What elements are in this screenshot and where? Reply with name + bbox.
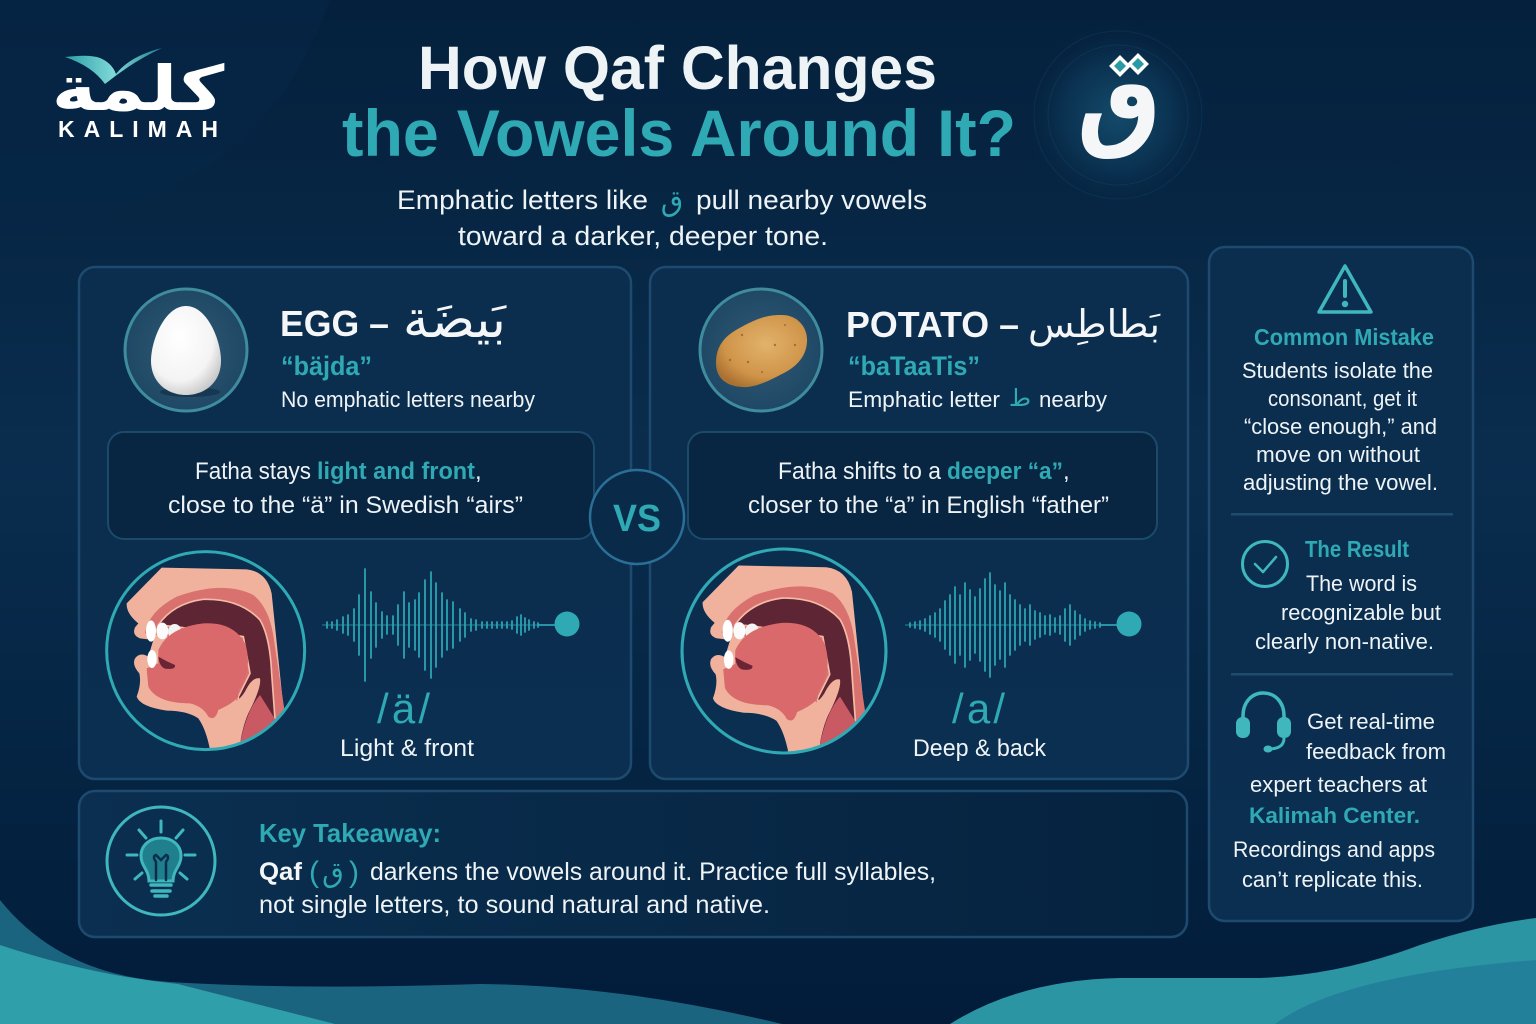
egg explanation box: close to the “ä” in Swedish “airs” [168,492,523,519]
egg explanation box [108,432,594,539]
title [342,34,1016,170]
subtitle: ق [661,184,683,218]
panel: potato [650,267,1188,779]
common mistake text: adjusting the vowel. [1243,470,1438,495]
feedback text [1233,709,1446,892]
potato heading: بَطاطِس [1028,302,1160,346]
waveform: deep vowel [905,573,1142,677]
result text: recognizable but [1281,600,1442,625]
logo Arabic wordmark: كلمة [52,53,225,125]
takeaway text: ( [309,856,319,889]
VS badge [590,470,684,564]
logo: Kalimah [52,48,225,142]
potato note: Emphatic letter [848,387,1000,412]
potato heading: POTATO – [846,304,1019,345]
vowel description: light and front: Light & front [340,735,474,762]
common mistake text: Students isolate the [1242,358,1433,383]
vowel symbol: /ä/: /ä/ [377,685,430,732]
egg explanation box: Fatha stays [195,458,311,485]
takeaway heading: Key Takeaway: [259,818,441,848]
common mistake text: move on without [1256,442,1421,467]
icon: warning triangle [1319,266,1371,312]
takeaway text: not single letters, to sound natural and native. [259,891,770,919]
egg transliteration: “bäjda” [281,351,372,381]
egg heading: بَيضَة [403,290,507,350]
icon: Qaf letter medallion [1023,20,1213,210]
egg explanation box: light and front [317,458,475,485]
common mistake heading: Common Mistake [1254,324,1434,350]
takeaway text: Qaf [259,858,303,886]
egg heading: EGG – [280,303,389,344]
common mistake text [1242,358,1438,495]
potato explanation box [688,432,1157,539]
logo name: KALIMAH [58,116,218,142]
decorative corner shape [0,0,330,232]
feedback text: expert teachers at [1250,772,1428,797]
vowel symbol: /a/: /a/ [952,685,1005,732]
potato note: ط [1009,384,1031,412]
takeaway text: darkens the vowels around it. Practice full syllables, [370,858,936,886]
egg note: No emphatic letters nearby [281,387,535,412]
vowel description: deep and back: Deep & back [913,735,1047,762]
Qaf dots [1112,56,1146,74]
egg explanation box: , [475,458,482,485]
logo wing [65,48,162,84]
waveform: light vowel [322,569,580,681]
feedback text: can’t replicate this. [1242,867,1423,892]
feedback text: Get real-time [1307,709,1435,734]
potato heading [846,302,1160,346]
feedback text: feedback from [1306,739,1446,764]
subtitle [397,184,927,251]
panel: sidebar [1209,247,1473,921]
Qaf letter: ٯ [1077,36,1161,161]
potato note [848,384,1107,412]
icon: potato [700,289,822,411]
title: the Vowels Around It? [342,96,1016,170]
icon: lightbulb [107,807,215,915]
result text [1255,571,1442,654]
subtitle: toward a darker, deeper tone. [458,221,828,251]
bottom waves [0,900,1536,1024]
potato explanation box: deeper “a” [947,458,1063,485]
potato note: nearby [1039,387,1107,412]
icon: check mark [1242,542,1288,586]
icon: egg [125,289,247,411]
VS badge: VS [613,498,661,540]
icon: headset [1236,693,1291,752]
potato explanation box: , [1063,458,1070,485]
subtitle: pull nearby vowels [696,185,927,215]
result text: clearly non-native. [1255,629,1434,654]
subtitle: Emphatic letters like [397,185,648,215]
potato explanation box: closer to the “a” in English “father” [748,492,1109,519]
potato explanation box: Fatha shifts to a [778,458,942,485]
takeaway text: ) [349,856,359,889]
title: How Qaf Changes [418,34,937,102]
mouth diagram: deep vowel [682,549,886,757]
takeaway text: ق [322,856,344,889]
egg heading [280,290,507,350]
panel: egg [79,267,631,779]
result text: The word is [1306,571,1417,596]
panel: key takeaway [79,791,1187,937]
feedback text: Recordings and apps [1233,837,1435,862]
potato transliteration: “baTaaTis” [848,351,980,381]
common mistake text: “close enough,” and [1244,414,1437,439]
mouth diagram: light vowel [107,552,305,753]
result heading: The Result [1305,536,1409,562]
feedback text: Kalimah Center. [1249,803,1420,828]
common mistake text: consonant, get it [1268,386,1418,411]
takeaway text [259,856,936,919]
